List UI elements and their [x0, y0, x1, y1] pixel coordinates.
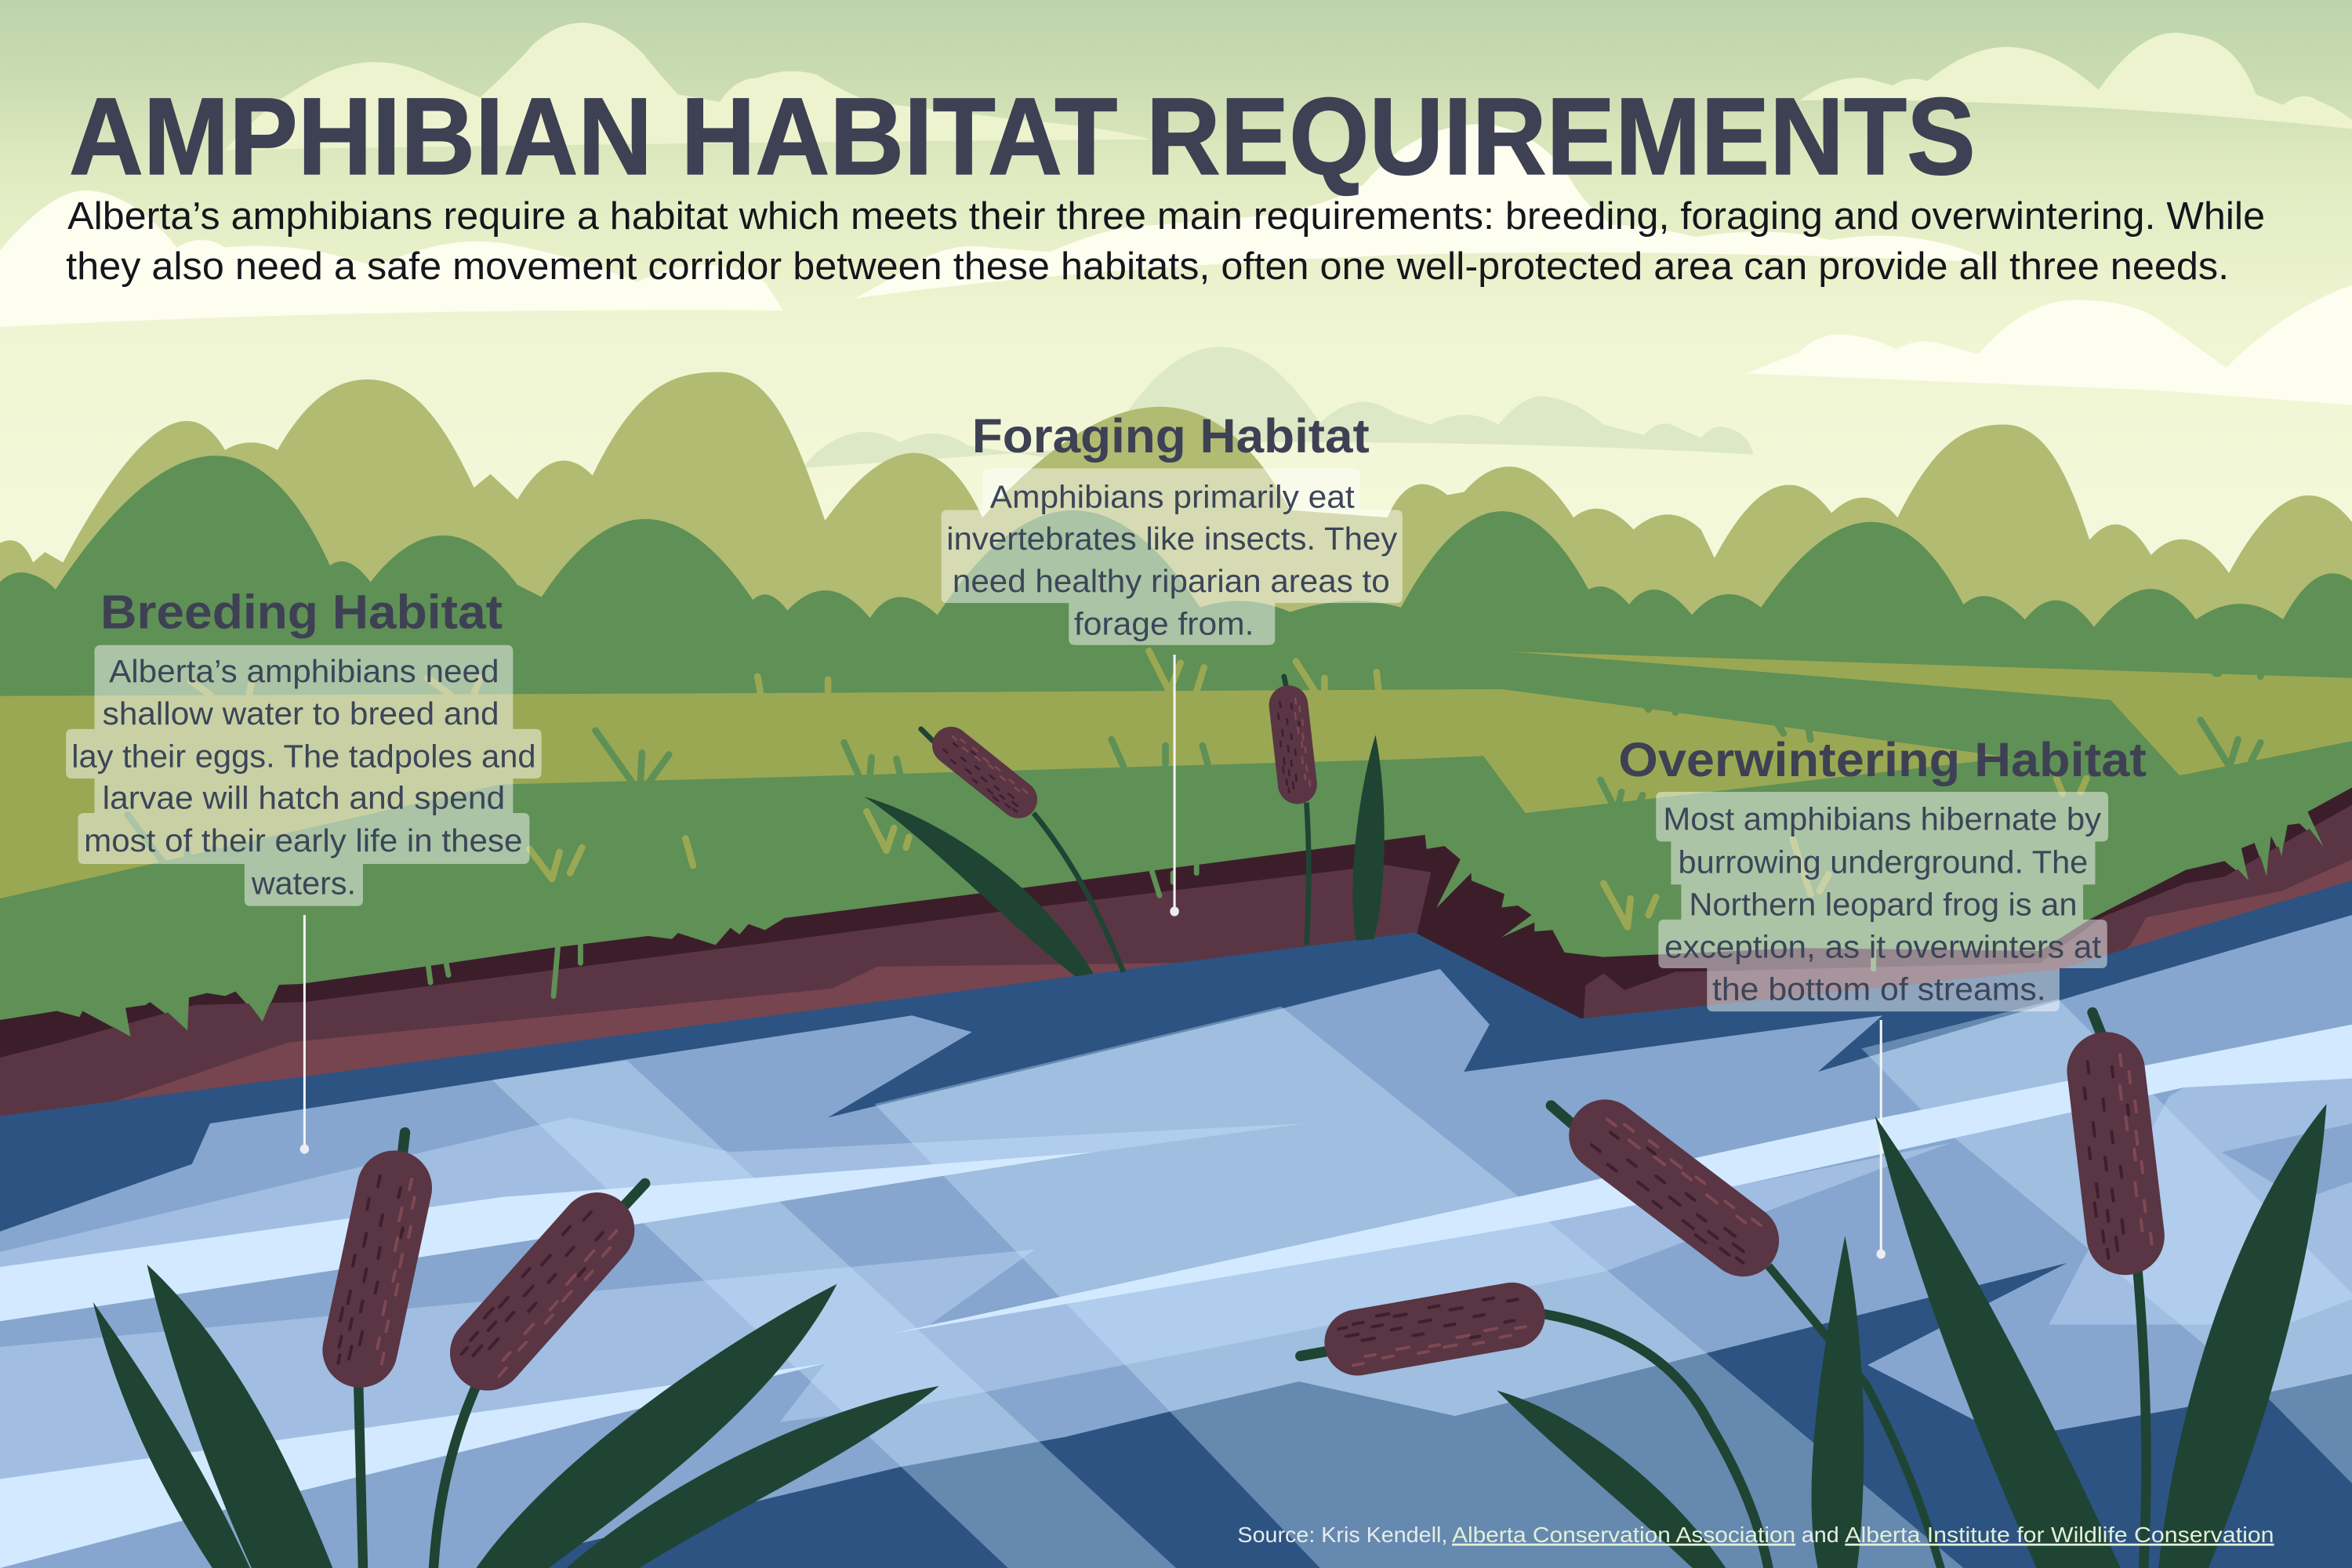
foreground plants left	[93, 1133, 939, 1568]
source credit: and	[1802, 1523, 1839, 1547]
panel: foraging habitat	[942, 409, 1403, 645]
foreground plants right	[1301, 1012, 2326, 1568]
light band centre	[0, 1143, 1950, 1479]
title: AMPHIBIAN HABITAT REQUIREMENTS	[69, 75, 1976, 198]
intro paragraph	[66, 195, 2265, 288]
cattail leaning	[434, 1184, 645, 1568]
deep water foreground	[535, 1263, 2352, 1568]
panel: breeding habitat	[66, 586, 542, 906]
body text: forage from.	[1074, 605, 1254, 641]
heading: foraging habitat: Foraging Habitat	[972, 409, 1370, 463]
cattail vertical	[2078, 1012, 2153, 1568]
deep water	[0, 880, 2352, 1568]
stem of leaning cattail	[1769, 1266, 1941, 1568]
source credit: Alberta Institute for Wildlife Conservation	[1845, 1523, 2274, 1547]
olive field left	[0, 689, 2012, 898]
cattail upright	[332, 1133, 420, 1568]
text background boxes	[1656, 792, 2108, 1011]
text background boxes	[66, 645, 542, 906]
source credit: Alberta Conservation Association	[1452, 1523, 1795, 1547]
heading: overwintering habitat: Overwintering Habitat	[1618, 733, 2147, 786]
leaf	[147, 1265, 333, 1568]
body text: most of their early life in these	[84, 822, 522, 858]
intro paragraph: Alberta’s amphibians require a habitat which meets their three main requirements: breeding, foraging and overwintering. While	[67, 195, 2265, 238]
light panel right	[2049, 1079, 2352, 1324]
white cloud right	[1746, 285, 2352, 405]
leader line: overwintering	[1876, 1020, 1886, 1259]
leaf	[1497, 1391, 1726, 1568]
body text: Amphibians primarily eat	[990, 478, 1355, 514]
body text: exception, as it overwinters at	[1664, 929, 2102, 965]
body text: Most amphibians hibernate by	[1663, 800, 2102, 837]
body text	[946, 478, 1398, 641]
body text: invertebrates like insects. They	[946, 521, 1398, 557]
river water	[0, 880, 2352, 1568]
olive hills	[0, 372, 2352, 900]
dark green hills and ground	[0, 456, 2352, 1080]
leaf	[2158, 1104, 2326, 1568]
body text	[1663, 800, 2102, 1007]
body text: shallow water to breed and	[103, 695, 499, 731]
cattail small left	[921, 729, 1123, 972]
leaf	[1875, 1116, 2121, 1568]
upper right cloud	[1800, 33, 2352, 129]
cattail diagonal	[1551, 1105, 1768, 1269]
white cloud centre	[855, 124, 1995, 299]
white cloud left	[0, 191, 783, 327]
heading: breeding habitat: Breeding Habitat	[100, 586, 503, 639]
leaf	[864, 797, 1094, 977]
leaf	[476, 1284, 837, 1568]
plants upper bank	[864, 677, 1385, 977]
cattail drooping	[1301, 1290, 1769, 1568]
leaf	[1352, 735, 1385, 941]
body text: larvae will hatch and spend	[103, 780, 505, 816]
leaf	[565, 1386, 939, 1568]
far pale hills	[803, 347, 1754, 468]
body text: Northern leopard frog is an	[1689, 887, 2077, 923]
leaf	[1812, 1236, 1864, 1568]
grass drips	[427, 866, 1874, 996]
source credit: Source: Kris Kendell,	[1237, 1523, 1447, 1547]
grass tufts olive on green	[191, 651, 2086, 927]
pale streak bottom left	[0, 1363, 825, 1568]
leader line: breeding	[300, 915, 309, 1154]
source credit	[1237, 1523, 2274, 1547]
grass tufts green on olive	[128, 654, 2260, 885]
riverbank	[0, 787, 2352, 1140]
upper left cloud	[225, 23, 1150, 150]
bank mid soil left	[0, 865, 1431, 1140]
body text: waters.	[251, 866, 356, 902]
translucent stripe centre	[874, 1007, 1963, 1568]
mid panel right	[2222, 1123, 2352, 1200]
body text	[71, 653, 536, 902]
clouds	[0, 23, 2352, 468]
translucent stripe right	[1861, 999, 2352, 1483]
olive field right	[1511, 652, 2352, 775]
bank rust soil left	[115, 963, 1179, 1117]
body text: need healthy riparian areas to	[953, 563, 1390, 599]
body text: burrowing underground. The	[1679, 844, 2088, 880]
light band upper left	[0, 1117, 1305, 1267]
bank dark soil	[0, 787, 2352, 1140]
text background boxes	[942, 469, 1403, 645]
leader line: foraging (behind plants)	[1170, 655, 1179, 916]
pale streak right	[892, 1025, 2352, 1334]
intro paragraph: they also need a safe movement corridor between these habitats, often one well-protected area can provide all three needs.	[66, 245, 2229, 288]
panel: overwintering habitat	[1618, 733, 2147, 1011]
pale streak left	[0, 1152, 1095, 1321]
cattail small right	[1276, 677, 1310, 945]
translucent stripe left	[492, 1061, 1176, 1568]
body text: the bottom of streams.	[1712, 971, 2046, 1007]
leaf	[93, 1302, 251, 1568]
green grass spikes over the bank	[79, 807, 2324, 1036]
mid blue water	[0, 915, 2352, 1568]
body text: Alberta’s amphibians need	[109, 653, 499, 689]
body text: lay their eggs. The tadpoles and	[71, 738, 536, 774]
bank mid soil right	[1582, 805, 2352, 1050]
bank rust soil right	[2100, 859, 2352, 975]
